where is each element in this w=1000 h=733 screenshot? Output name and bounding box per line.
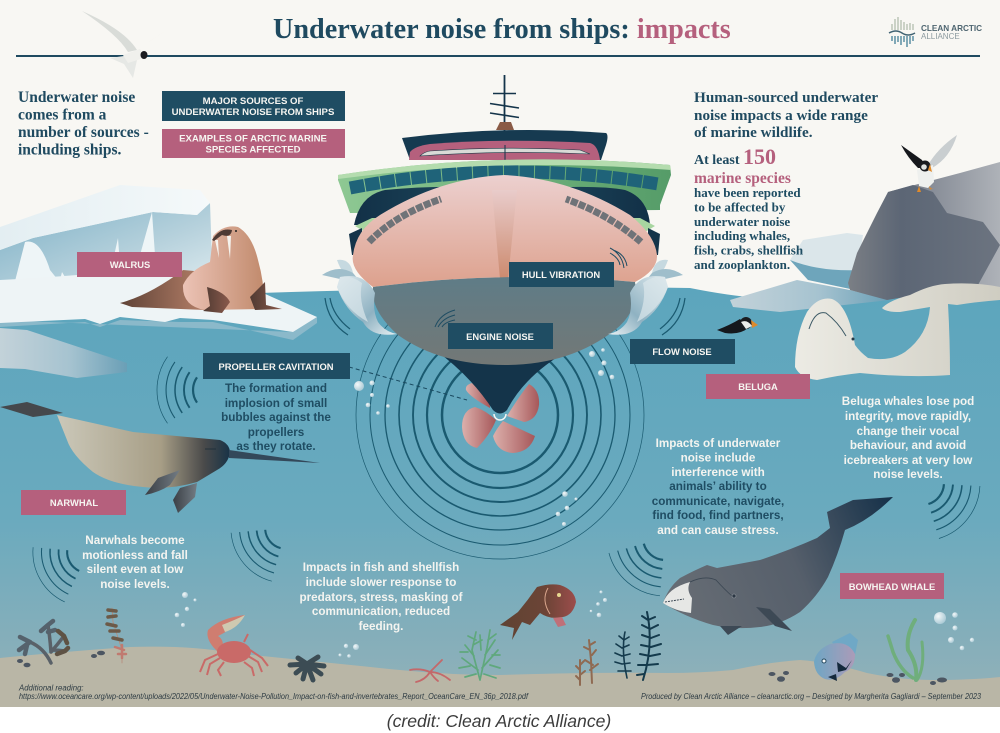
image credit: (credit: Clean Arctic Alliance) <box>387 711 611 731</box>
label: narwhal <box>21 490 126 515</box>
legend: species affected: EXAMPLES OF ARCTIC MARINE <box>179 134 328 144</box>
label: flow noise: FLOW NOISE <box>652 346 712 357</box>
stat: 150 marine species: At least 150 <box>694 144 776 169</box>
label: engine noise: ENGINE NOISE <box>466 331 534 342</box>
text: impacts of noise: interference with <box>671 466 765 479</box>
stat: 150 marine species: including whales, <box>694 228 790 243</box>
text: fish and shellfish: predators, stress, masking of <box>299 591 463 604</box>
text: fish and shellfish: Impacts in fish and shellfish <box>303 561 459 574</box>
sea water <box>0 285 1000 707</box>
bubbles <box>175 348 974 658</box>
text: beluga: Beluga whales lose pod <box>842 395 974 408</box>
text: beluga: change their vocal <box>857 425 959 438</box>
icon: sea urchin <box>290 657 324 680</box>
legend: major sources <box>162 91 345 121</box>
footer: additional reading: https://www.oceancare.org/wp-content/uploads/2022/05/Underwater-Noise-Pollution_Impact-on-fish-and-invertebrates_Report_OceanCare_EN_36p_2018.pdf <box>19 692 529 701</box>
iceberg: left <box>0 185 317 340</box>
header divider <box>16 55 980 57</box>
label: hull vibration <box>509 262 614 287</box>
icon: brown weeds <box>576 640 598 685</box>
logo: Clean Arctic Alliance <box>889 17 982 47</box>
text: propeller cavitation: propellers <box>248 426 305 439</box>
text: impacts of noise: noise include <box>681 452 756 464</box>
sound waves: narwhal lower <box>24 533 89 607</box>
bow wave: left <box>322 260 397 335</box>
icon: swimming puffin <box>717 317 758 333</box>
narwhal <box>0 402 320 513</box>
icon: blue fish <box>814 633 858 681</box>
legend: species affected: SPECIES AFFECTED <box>205 144 301 156</box>
noise rings <box>356 271 644 559</box>
stat: 150 marine species: and zooplankton. <box>694 257 790 272</box>
label: bowhead whale: BOWHEAD WHALE <box>849 581 935 592</box>
text: fish and shellfish: communication, reduced <box>312 605 450 618</box>
text: beluga: behaviour, and avoid <box>850 439 966 452</box>
label: propeller cavitation: PROPELLER CAVITATION <box>218 361 334 372</box>
footer: additional reading: Additional reading: <box>18 684 84 692</box>
beluga <box>795 283 1000 380</box>
text: propeller cavitation: as they rotate. <box>236 440 316 453</box>
bow wave: right <box>608 260 683 335</box>
walrus <box>120 226 282 313</box>
icon: green seaweed <box>888 620 923 680</box>
seabed sand <box>0 647 1000 707</box>
icon: arctic tern <box>82 11 170 78</box>
intro text: number of sources - <box>18 124 149 141</box>
text: narwhal: noise levels. <box>100 578 170 591</box>
right intro text: of marine wildlife. <box>694 124 813 141</box>
label: engine noise <box>448 323 553 349</box>
icon: brittle star <box>410 660 450 682</box>
ship <box>338 75 671 420</box>
logo: Clean Arctic Alliance: CLEAN ARCTIC <box>921 24 982 33</box>
sound waves: fish <box>223 515 293 588</box>
sound waves: narwhal <box>157 357 197 423</box>
sound waves: beluga <box>916 468 988 545</box>
sound waves: right flow <box>660 298 685 335</box>
footer: additional reading <box>18 684 529 701</box>
icon: red fish <box>500 584 576 640</box>
sound waves: left flow <box>325 298 350 335</box>
text: beluga: noise levels. <box>873 468 943 481</box>
text: impacts of noise: communicate, navigate, <box>652 495 784 508</box>
text: propeller cavitation: bubbles against the <box>221 411 331 424</box>
icon: puffin on rock <box>901 135 957 192</box>
label: narwhal: NARWHAL <box>50 497 98 508</box>
intro text: comes from a <box>18 106 107 124</box>
stat: 150 marine species: underwater noise <box>694 214 790 229</box>
propeller <box>462 383 539 453</box>
label: beluga: BELUGA <box>738 381 778 392</box>
label: propeller cavitation <box>203 353 350 379</box>
label: beluga <box>706 374 810 399</box>
text: impacts of noise: Impacts of underwater <box>656 437 781 450</box>
text: beluga: integrity, move rapidly, <box>845 410 971 423</box>
label: walrus: WALRUS <box>110 259 150 270</box>
text: propeller cavitation: The formation and <box>225 382 327 395</box>
icon: green coral <box>459 630 500 680</box>
label: walrus <box>77 252 182 277</box>
text: fish and shellfish: include slower response to <box>306 576 456 589</box>
text: fish and shellfish: feeding. <box>359 620 403 633</box>
label: bowhead whale <box>840 573 944 599</box>
rocks <box>848 162 1000 300</box>
intro text: Underwater noise <box>18 89 135 106</box>
title: Underwater noise from ships: impacts <box>273 14 731 45</box>
legend: species affected <box>162 129 345 158</box>
sound waves: hull vibration <box>610 248 627 268</box>
label: flow noise <box>630 339 735 364</box>
pebbles <box>17 651 947 685</box>
text: impacts of noise: find food, find partners, <box>652 509 784 522</box>
right intro text: Human-sourced underwater <box>694 89 878 106</box>
credit strip <box>0 707 1000 733</box>
text: impacts of noise <box>652 437 784 537</box>
stat: 150 marine species: fish, crabs, shellfish <box>694 242 804 258</box>
stat: 150 marine species <box>694 144 804 272</box>
text: beluga: icebreakers at very low <box>844 454 973 467</box>
icon: dark fern small <box>615 632 631 678</box>
icon: crab <box>200 615 268 676</box>
logo: Clean Arctic Alliance: ALLIANCE <box>921 32 960 41</box>
legend: major sources: MAJOR SOURCES OF <box>203 96 304 107</box>
stat: 150 marine species: to be affected by <box>694 200 786 214</box>
intro text: including ships. <box>18 142 122 158</box>
icon: brown weed <box>107 608 126 663</box>
stat: 150 marine species: have been reported <box>694 185 801 200</box>
label: hull vibration: HULL VIBRATION <box>522 269 600 280</box>
icon: dark fern large <box>637 612 661 680</box>
legend: major sources: UNDERWATER NOISE FROM SHIPS <box>172 107 335 118</box>
text: propeller cavitation: implosion of small <box>225 397 327 410</box>
sound waves: engine noise <box>435 310 455 327</box>
footer: production credit: Produced by Clean Arctic Alliance – cleanarctic.org – Designed by Margherita Gagliardi – September 2023 <box>641 692 982 701</box>
iceberg: lower left <box>0 328 127 378</box>
text: impacts of noise: and can cause stress. <box>657 524 779 537</box>
iceberg: right <box>730 233 890 312</box>
right intro text: noise impacts a wide range <box>694 107 868 124</box>
text: narwhal: silent even at low <box>87 563 184 576</box>
bowhead whale <box>663 497 893 635</box>
sound waves: whale <box>602 530 679 604</box>
text: impacts of noise: animals’ ability to <box>669 480 767 493</box>
cavitation pointer <box>349 367 467 400</box>
icon: dark seaweed <box>19 621 68 663</box>
text: narwhal: motionless and fall <box>82 549 188 562</box>
text: narwhal: Narwhals become <box>85 534 185 547</box>
stat: 150 marine species: marine species <box>694 170 791 187</box>
